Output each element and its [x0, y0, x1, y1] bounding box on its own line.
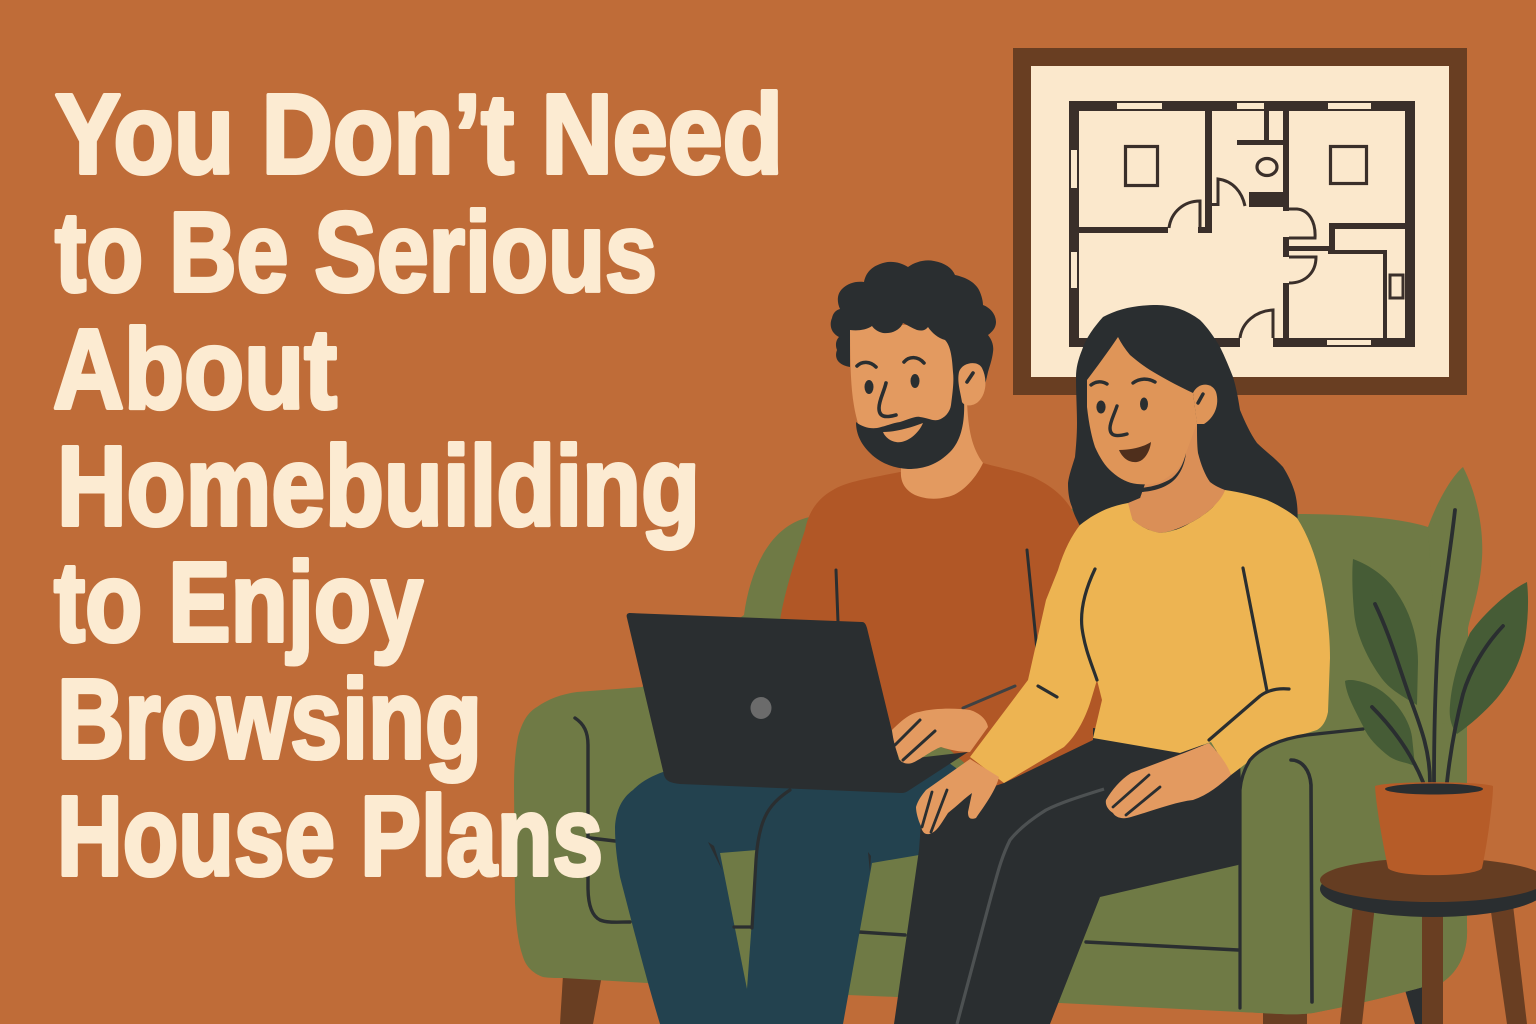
title: About — [53, 306, 337, 432]
sofa body — [514, 505, 1467, 1014]
framed floor plan — [1013, 48, 1467, 395]
woman's face — [1087, 337, 1217, 498]
laptop logo — [750, 697, 772, 719]
title: You Don’t Need — [55, 71, 783, 197]
sofa — [514, 505, 1467, 1024]
woman's left hand — [916, 759, 999, 834]
woman's pants — [894, 728, 1244, 1024]
left leaf — [1352, 559, 1418, 705]
woman's neck — [1128, 423, 1225, 533]
title: to Enjoy — [54, 539, 423, 665]
title: House Plans — [57, 773, 603, 899]
woman's sweater — [970, 490, 1330, 783]
woman's ear — [1193, 385, 1217, 424]
plant stems — [1372, 510, 1503, 782]
plant leaves — [1345, 510, 1528, 782]
man — [780, 260, 1104, 795]
woman's hair — [1068, 305, 1298, 530]
floor plan walls and rooms — [1069, 101, 1415, 347]
sofa seam lines — [575, 718, 1238, 950]
man's face — [850, 325, 958, 430]
sofa feet — [560, 975, 1424, 1024]
plant: tall back leaf — [1428, 467, 1482, 720]
plant pot — [1375, 782, 1493, 875]
gap between legs — [720, 850, 757, 989]
table top — [1320, 861, 1536, 917]
table legs — [1340, 905, 1527, 1024]
title: Browsing — [57, 656, 482, 782]
title: to Be Serious — [55, 189, 657, 315]
sofa right armrest — [1240, 722, 1467, 1014]
man's hand — [892, 709, 988, 764]
title: Homebuilding — [57, 423, 700, 549]
man's ear — [958, 363, 985, 405]
woman's right hand — [1106, 743, 1231, 818]
man's arm line — [963, 686, 1015, 708]
man's shirt — [780, 463, 1104, 795]
man's shirt lines — [836, 550, 1037, 650]
title — [53, 71, 783, 899]
laptop — [627, 613, 968, 793]
side table — [1320, 858, 1536, 1024]
man's neck — [901, 400, 983, 499]
man's hair and beard — [831, 260, 996, 469]
sweater lines — [1038, 568, 1289, 740]
lower left leaf — [1345, 680, 1415, 766]
man's facial features — [857, 358, 973, 442]
man's jeans — [615, 760, 1000, 1024]
woman's facial features — [1091, 379, 1203, 462]
right leaf — [1450, 582, 1528, 734]
woman's jaw shadow — [1140, 453, 1186, 498]
